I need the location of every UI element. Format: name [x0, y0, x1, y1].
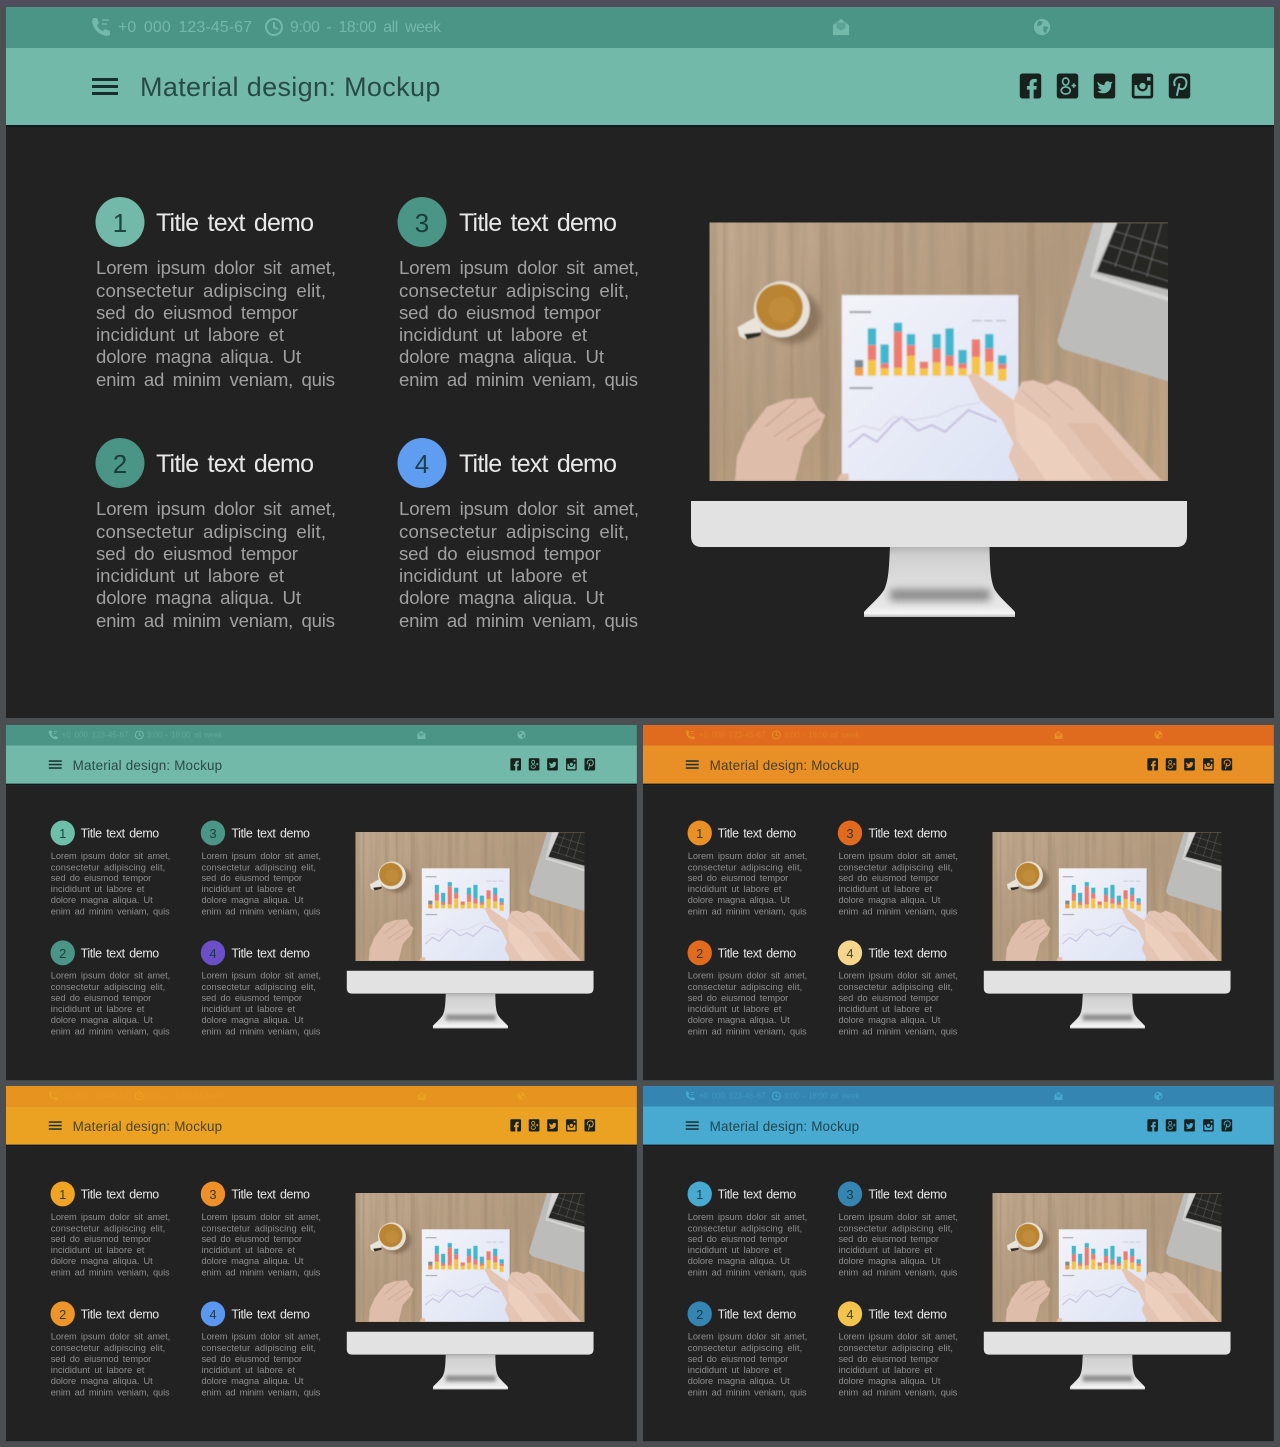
item 2: incididunt ut labore et: [51, 1004, 145, 1014]
item 4: incididunt ut labore et: [202, 1365, 295, 1375]
contact details: +0 000 123-45-67: [62, 730, 129, 739]
item 3: Title text demo: [231, 1187, 310, 1201]
item 3: consectetur adipiscing elit,: [202, 862, 316, 872]
monitor mockup: [691, 217, 1187, 617]
item 4: Lorem ipsum dolor sit amet,: [839, 1332, 958, 1342]
item 1: Title text demo: [81, 826, 159, 840]
icon: mail: [417, 1092, 425, 1100]
icon: mail: [417, 731, 425, 739]
monitor mockup: [347, 829, 594, 1028]
item 2: enim ad minim veniam, quis: [96, 610, 335, 631]
header bar: [6, 745, 637, 785]
item 3: 3: [209, 1187, 217, 1202]
item 3: enim ad minim veniam, quis: [202, 1268, 321, 1278]
item 2: sed do eiusmod tempor: [51, 993, 151, 1003]
panel: small teal slide: [6, 725, 637, 1080]
icon: mail: [1054, 731, 1062, 739]
monitor mockup: [984, 1190, 1231, 1389]
item 2: consectetur adipiscing elit,: [51, 982, 165, 992]
item 3: [201, 821, 321, 917]
contact details: [49, 730, 222, 739]
item 1: [688, 821, 807, 917]
contact details: [49, 1091, 222, 1100]
item 2: Title text demo: [718, 946, 796, 960]
item 4: enim ad minim veniam, quis: [202, 1387, 321, 1397]
item 1: Title text demo: [81, 1187, 159, 1201]
item 2: sed do eiusmod tempor: [51, 1354, 151, 1364]
item 1: consectetur adipiscing elit,: [51, 1223, 165, 1233]
item 1: [51, 1182, 170, 1278]
item 3: consectetur adipiscing elit,: [399, 280, 629, 301]
item 1: consectetur adipiscing elit,: [96, 280, 326, 301]
item 4: incididunt ut labore et: [839, 1004, 932, 1014]
content area: [6, 1146, 637, 1441]
item 2: Lorem ipsum dolor sit amet,: [688, 1332, 807, 1342]
item 2: Lorem ipsum dolor sit amet,: [96, 498, 336, 519]
item 1: 1: [113, 208, 127, 238]
item 2: consectetur adipiscing elit,: [688, 1343, 802, 1353]
item 3: enim ad minim veniam, quis: [839, 1268, 958, 1278]
item 4: enim ad minim veniam, quis: [839, 1387, 958, 1397]
content area: [643, 785, 1274, 1080]
item 1: incididunt ut labore et: [688, 1245, 782, 1255]
item 3: incididunt ut labore et: [839, 884, 932, 894]
contact details: +0 000 123-45-67: [699, 730, 766, 739]
item 3: 3: [415, 208, 429, 238]
item 3: 3: [846, 826, 854, 841]
item 3: enim ad minim veniam, quis: [202, 907, 321, 917]
social icons: [1147, 1119, 1232, 1132]
item 1: consectetur adipiscing elit,: [688, 1223, 802, 1233]
item 4: Lorem ipsum dolor sit amet,: [839, 971, 958, 981]
item 4: 4: [209, 946, 217, 961]
item 2: enim ad minim veniam, quis: [688, 1026, 807, 1036]
item 1: 1: [696, 826, 703, 841]
item 3: Lorem ipsum dolor sit amet,: [839, 1212, 958, 1222]
item 3: Lorem ipsum dolor sit amet,: [202, 851, 321, 861]
item 1: dolore magna aliqua. Ut: [51, 895, 153, 905]
icon: menu: [686, 1121, 699, 1130]
item 3: sed do eiusmod tempor: [202, 873, 302, 883]
item 3: dolore magna aliqua. Ut: [202, 895, 304, 905]
item 2: sed do eiusmod tempor: [688, 1354, 788, 1364]
social icons: [510, 1119, 595, 1132]
item 4: Title text demo: [459, 450, 617, 478]
top bar: [6, 725, 637, 745]
item 2: incididunt ut labore et: [51, 1365, 145, 1375]
item 4: Title text demo: [868, 1307, 947, 1321]
item 2: consectetur adipiscing elit,: [688, 982, 802, 992]
item 4: dolore magna aliqua. Ut: [202, 1376, 304, 1386]
item 3: incididunt ut labore et: [399, 324, 588, 345]
item 1: dolore magna aliqua. Ut: [688, 895, 790, 905]
item 2: 2: [59, 946, 66, 961]
contact details: 9:00 - 18:00 all week: [784, 730, 859, 739]
icon: globe: [517, 731, 525, 739]
item 3: Title text demo: [231, 826, 310, 840]
item 4: consectetur adipiscing elit,: [202, 1343, 316, 1353]
item 1: enim ad minim veniam, quis: [96, 369, 335, 390]
item 4: 4: [846, 1307, 854, 1322]
item 4: sed do eiusmod tempor: [202, 1354, 302, 1364]
icon: mail: [833, 19, 849, 35]
item 4: 4: [846, 946, 854, 961]
top bar: [643, 725, 1274, 745]
item 3: Lorem ipsum dolor sit amet,: [202, 1212, 321, 1222]
item 2: Lorem ipsum dolor sit amet,: [51, 1332, 170, 1342]
item 1: Lorem ipsum dolor sit amet,: [51, 851, 170, 861]
item 3: sed do eiusmod tempor: [399, 302, 601, 323]
item 1: 1: [59, 1187, 66, 1202]
panel: small blue slide: [643, 1086, 1274, 1441]
item 1: sed do eiusmod tempor: [688, 1234, 788, 1244]
item 3: incididunt ut labore et: [839, 1245, 932, 1255]
item 4: dolore magna aliqua. Ut: [399, 587, 605, 608]
item 1: sed do eiusmod tempor: [688, 873, 788, 883]
item 1: [688, 1182, 807, 1278]
item 1: consectetur adipiscing elit,: [688, 862, 802, 872]
heading: Material design: Mockup: [73, 758, 222, 773]
item 1: incididunt ut labore et: [96, 324, 285, 345]
header bar: [6, 1106, 637, 1146]
item 2: incididunt ut labore et: [688, 1004, 782, 1014]
item 1: dolore magna aliqua. Ut: [96, 346, 302, 367]
item 2: dolore magna aliqua. Ut: [688, 1376, 790, 1386]
item 3: consectetur adipiscing elit,: [839, 862, 953, 872]
contact details: [686, 730, 859, 739]
item 1: 1: [59, 826, 66, 841]
item 1: Title text demo: [718, 1187, 796, 1201]
item 2: incididunt ut labore et: [688, 1365, 782, 1375]
monitor mockup: [984, 829, 1231, 1028]
item 3: Title text demo: [868, 1187, 947, 1201]
item 3: [838, 1182, 958, 1278]
item 2: 2: [696, 1307, 703, 1322]
item 4: dolore magna aliqua. Ut: [839, 1015, 941, 1025]
contact details: 9:00 - 18:00 all week: [290, 19, 442, 36]
item 2: [51, 1301, 170, 1397]
item 4: enim ad minim veniam, quis: [399, 610, 638, 631]
item 4: Lorem ipsum dolor sit amet,: [399, 498, 639, 519]
item 1: sed do eiusmod tempor: [51, 873, 151, 883]
item 1: enim ad minim veniam, quis: [688, 1268, 807, 1278]
panel: small orange slide: [643, 725, 1274, 1080]
item 1: incididunt ut labore et: [688, 884, 782, 894]
item 4: Title text demo: [868, 946, 947, 960]
item 4: dolore magna aliqua. Ut: [202, 1015, 304, 1025]
heading: Material design: Mockup: [710, 1119, 859, 1134]
item 2: Title text demo: [156, 450, 314, 478]
icon: globe: [517, 1092, 525, 1100]
item 1: enim ad minim veniam, quis: [51, 1268, 170, 1278]
item 4: sed do eiusmod tempor: [839, 993, 939, 1003]
item 4: 4: [209, 1307, 217, 1322]
item 4: Title text demo: [231, 1307, 310, 1321]
item 1: Lorem ipsum dolor sit amet,: [688, 851, 807, 861]
item 1: dolore magna aliqua. Ut: [51, 1256, 153, 1266]
item 4: [398, 438, 639, 631]
item 2: 2: [696, 946, 703, 961]
item 2: enim ad minim veniam, quis: [51, 1026, 170, 1036]
item 1: enim ad minim veniam, quis: [688, 907, 807, 917]
contact details: [686, 1091, 859, 1100]
item 4: incididunt ut labore et: [839, 1365, 932, 1375]
social icons: [1147, 758, 1232, 771]
item 2: dolore magna aliqua. Ut: [96, 587, 302, 608]
item 3: incididunt ut labore et: [202, 1245, 295, 1255]
heading: Material design: Mockup: [73, 1119, 222, 1134]
item 2: [51, 940, 170, 1036]
item 3: incididunt ut labore et: [202, 884, 295, 894]
item 2: 2: [113, 449, 127, 479]
item 4: Lorem ipsum dolor sit amet,: [202, 971, 321, 981]
item 3: sed do eiusmod tempor: [202, 1234, 302, 1244]
item 3: consectetur adipiscing elit,: [839, 1223, 953, 1233]
item 2: consectetur adipiscing elit,: [51, 1343, 165, 1353]
item 3: sed do eiusmod tempor: [839, 1234, 939, 1244]
item 1: [96, 197, 336, 390]
item 2: sed do eiusmod tempor: [96, 543, 298, 564]
panel: large teal slide: [6, 7, 1274, 718]
icon: menu: [49, 760, 62, 769]
item 2: dolore magna aliqua. Ut: [688, 1015, 790, 1025]
item 4: sed do eiusmod tempor: [839, 1354, 939, 1364]
icon: mail: [1054, 1092, 1062, 1100]
contact details: +0 000 123-45-67: [62, 1091, 129, 1100]
item 2: sed do eiusmod tempor: [688, 993, 788, 1003]
item 4: Lorem ipsum dolor sit amet,: [202, 1332, 321, 1342]
item 2: 2: [59, 1307, 66, 1322]
item 4: sed do eiusmod tempor: [202, 993, 302, 1003]
item 3: 3: [846, 1187, 854, 1202]
item 3: sed do eiusmod tempor: [839, 873, 939, 883]
item 4: sed do eiusmod tempor: [399, 543, 601, 564]
item 4: consectetur adipiscing elit,: [839, 982, 953, 992]
contact details: 9:00 - 18:00 all week: [147, 1091, 222, 1100]
item 4: consectetur adipiscing elit,: [839, 1343, 953, 1353]
header bar: [6, 48, 1274, 127]
item 2: incididunt ut labore et: [96, 565, 285, 586]
item 3: consectetur adipiscing elit,: [202, 1223, 316, 1233]
item 2: dolore magna aliqua. Ut: [51, 1015, 153, 1025]
item 2: enim ad minim veniam, quis: [688, 1387, 807, 1397]
item 2: Title text demo: [81, 946, 159, 960]
item 1: sed do eiusmod tempor: [51, 1234, 151, 1244]
item 1: Lorem ipsum dolor sit amet,: [688, 1212, 807, 1222]
item 1: dolore magna aliqua. Ut: [688, 1256, 790, 1266]
icon: globe: [1154, 731, 1162, 739]
item 2: Lorem ipsum dolor sit amet,: [688, 971, 807, 981]
item 4: incididunt ut labore et: [202, 1004, 295, 1014]
item 1: Lorem ipsum dolor sit amet,: [51, 1212, 170, 1222]
item 4: [838, 1301, 958, 1397]
header bar: [643, 1106, 1274, 1146]
item 1: Lorem ipsum dolor sit amet,: [96, 257, 336, 278]
content area: [643, 1146, 1274, 1441]
item 2: Title text demo: [718, 1307, 796, 1321]
item 3: enim ad minim veniam, quis: [399, 369, 638, 390]
item 4: enim ad minim veniam, quis: [202, 1026, 321, 1036]
contact details: [92, 18, 442, 36]
item 4: [201, 1301, 321, 1397]
item 3: dolore magna aliqua. Ut: [202, 1256, 304, 1266]
item 2: Title text demo: [81, 1307, 159, 1321]
item 2: [96, 438, 336, 631]
item 3: Lorem ipsum dolor sit amet,: [839, 851, 958, 861]
item 1: enim ad minim veniam, quis: [51, 907, 170, 917]
item 1: Title text demo: [718, 826, 796, 840]
header bar: [643, 745, 1274, 785]
item 3: enim ad minim veniam, quis: [839, 907, 958, 917]
item 1: consectetur adipiscing elit,: [51, 862, 165, 872]
item 4: consectetur adipiscing elit,: [399, 521, 629, 542]
item 4: [201, 940, 321, 1036]
top bar: [6, 1086, 637, 1106]
item 1: Title text demo: [156, 209, 314, 237]
item 1: [51, 821, 170, 917]
contact details: +0 000 123-45-67: [118, 19, 252, 36]
item 2: [688, 940, 807, 1036]
item 2: dolore magna aliqua. Ut: [51, 1376, 153, 1386]
item 4: consectetur adipiscing elit,: [202, 982, 316, 992]
item 3: [398, 197, 639, 390]
item 3: Title text demo: [459, 209, 617, 237]
panel: small amber slide: [6, 1086, 637, 1441]
item 4: [838, 940, 958, 1036]
icon: globe: [1034, 19, 1050, 35]
item 3: Lorem ipsum dolor sit amet,: [399, 257, 639, 278]
item 2: enim ad minim veniam, quis: [51, 1387, 170, 1397]
icon: menu: [686, 760, 699, 769]
social icons: [510, 758, 595, 771]
item 3: dolore magna aliqua. Ut: [839, 1256, 941, 1266]
icon: globe: [1154, 1092, 1162, 1100]
contact details: +0 000 123-45-67: [699, 1091, 766, 1100]
item 4: 4: [415, 449, 429, 479]
top bar: [643, 1086, 1274, 1106]
contact details: 9:00 - 18:00 all week: [784, 1091, 859, 1100]
heading: Material design: Mockup: [710, 758, 859, 773]
monitor mockup: [347, 1190, 594, 1389]
item 3: dolore magna aliqua. Ut: [399, 346, 605, 367]
item 3: 3: [209, 826, 217, 841]
item 3: Title text demo: [868, 826, 947, 840]
item 1: incididunt ut labore et: [51, 884, 145, 894]
item 1: 1: [696, 1187, 703, 1202]
item 4: Title text demo: [231, 946, 310, 960]
contact details: 9:00 - 18:00 all week: [147, 730, 222, 739]
item 4: incididunt ut labore et: [399, 565, 588, 586]
item 2: consectetur adipiscing elit,: [96, 521, 326, 542]
item 4: dolore magna aliqua. Ut: [839, 1376, 941, 1386]
item 3: [838, 821, 958, 917]
item 2: [688, 1301, 807, 1397]
heading: Material design: Mockup: [140, 72, 441, 102]
item 3: dolore magna aliqua. Ut: [839, 895, 941, 905]
icon: menu: [49, 1121, 62, 1130]
social icons: [1020, 74, 1190, 98]
item 2: Lorem ipsum dolor sit amet,: [51, 971, 170, 981]
item 1: incididunt ut labore et: [51, 1245, 145, 1255]
icon: menu: [92, 78, 118, 95]
item 3: [201, 1182, 321, 1278]
item 4: enim ad minim veniam, quis: [839, 1026, 958, 1036]
top bar: [6, 7, 1274, 48]
content area: [6, 785, 637, 1080]
content area: [6, 127, 1274, 718]
item 1: sed do eiusmod tempor: [96, 302, 298, 323]
